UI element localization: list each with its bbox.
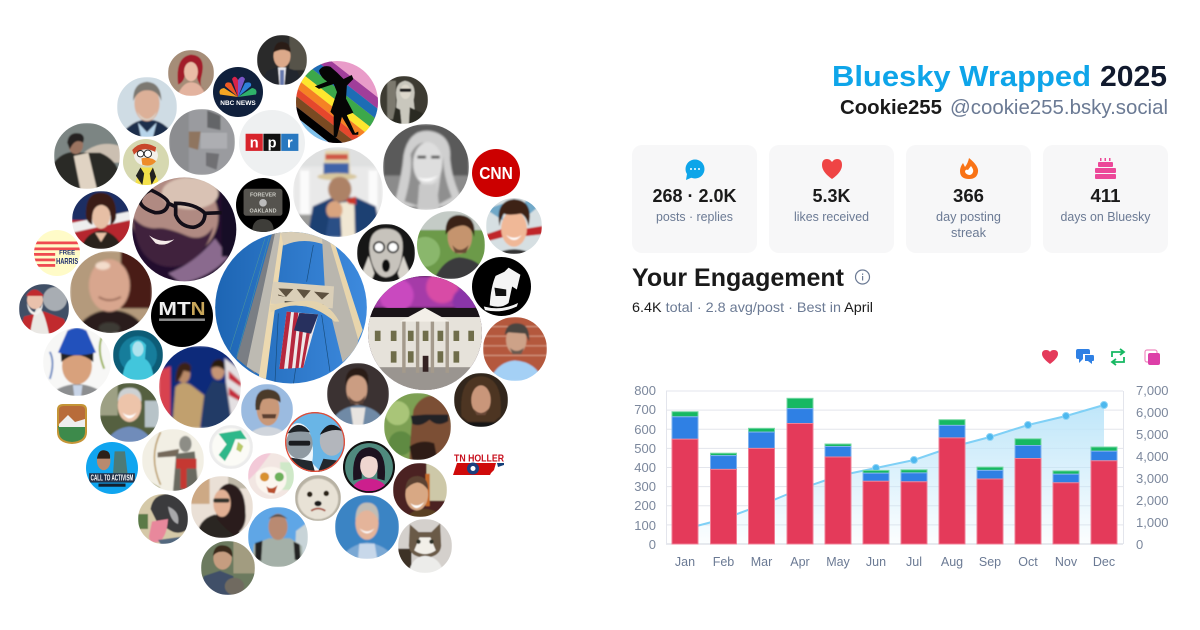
panel: day posting streak: streak (951, 226, 987, 240)
avatar: MTN logo: N (191, 298, 206, 319)
avatar: man dark jacket (327, 363, 389, 425)
chart legend (1042, 349, 1160, 365)
avatar: NPR logo: r (287, 136, 293, 152)
avatar: red-haired woman (168, 50, 214, 96)
left axis labels (634, 383, 656, 552)
avatar: man in suit (257, 35, 307, 85)
avatar: goth girl (343, 441, 395, 493)
avatar: ship logo (472, 257, 531, 316)
right axis labels: 4,000 (1136, 449, 1169, 464)
stacked bars (672, 398, 1117, 544)
avatar: bw blonde portrait (383, 124, 469, 210)
avatar: Mark Cuban (393, 463, 447, 517)
month labels: Oct (1018, 555, 1038, 569)
avatar: call to activism (86, 442, 138, 494)
month labels: Jan (675, 555, 695, 569)
right axis labels (1136, 383, 1169, 552)
avatar: uncle sam (293, 147, 383, 237)
right axis labels: 1,000 (1136, 515, 1169, 530)
user name and handle: Cookie255 (840, 97, 942, 119)
avatar: couple at flags (159, 346, 241, 428)
panel: likes received (769, 145, 894, 253)
panel: days on Bluesky (1043, 145, 1168, 253)
user name and handle: @cookie255.bsky.social (950, 97, 1168, 119)
avatar: alliance shield badge (57, 404, 87, 444)
cumulative area and line (685, 402, 1108, 544)
panel: avatar bubble cluster (19, 34, 547, 595)
month labels: Mar (751, 555, 772, 569)
month labels: Apr (790, 555, 810, 569)
left axis labels: 800 (634, 383, 656, 398)
right axis labels: 5,000 (1136, 427, 1169, 442)
avatar: NPR logo (239, 110, 305, 176)
panel: posts and replies (632, 145, 757, 253)
avatar: the scream (357, 224, 415, 282)
engagement summary: 6.4K total · 2.8 avg/post · Best in April (632, 299, 873, 315)
icon: legend quotes (1145, 350, 1160, 365)
avatar: free harris logo: FREE (59, 250, 75, 256)
avatar: dog tongue out (138, 494, 188, 544)
icon: legend reposts (1112, 349, 1124, 365)
icon: cake (1095, 158, 1116, 179)
avatar: twins with red ring (285, 412, 345, 472)
avatar: woman with flag (72, 191, 130, 249)
icon: legend replies (1076, 349, 1094, 364)
left axis labels: 700 (634, 402, 656, 417)
avatar: blonde in sunglasses (380, 76, 428, 124)
panel: days on Bluesky: days on Bluesky (1060, 210, 1151, 224)
left axis labels: 600 (634, 422, 656, 437)
month labels: Feb (713, 555, 734, 569)
avatar: white dog (295, 475, 341, 521)
avatar: glasses man main (132, 177, 236, 282)
avatar: bridge with flag (215, 232, 367, 384)
month labels: Jun (866, 555, 886, 569)
panel: posts and replies: posts · replies (656, 210, 733, 224)
avatar: woman with dark hair (191, 476, 253, 538)
avatar: man at brick wall (483, 317, 547, 381)
avatar: teal hoodie (113, 330, 163, 380)
avatar: forever oakland (236, 178, 290, 232)
panel: day posting streak (906, 145, 1031, 253)
avatar: man lying on couch (54, 123, 120, 189)
panel: days on Bluesky: 411 (1090, 185, 1120, 206)
right axis labels: 3,000 (1136, 471, 1169, 486)
month labels: May (826, 555, 851, 569)
avatar: anime cat girl (248, 453, 294, 499)
logo: TN Holler (453, 452, 504, 475)
right axis labels: 7,000 (1136, 383, 1169, 398)
avatar: long curly hair man (454, 373, 508, 427)
avatar: cartoon duck (123, 139, 169, 185)
title: 2025 (1100, 61, 1167, 93)
left axis labels: 300 (634, 479, 656, 494)
avatar: free harris logo (34, 230, 80, 276)
avatar: CNN logo: CNN (479, 163, 513, 183)
avatar: party hat man (44, 328, 110, 396)
avatar: man with dog (201, 541, 255, 595)
avatar: NBC News logo: NBC NEWS (220, 100, 256, 107)
avatar: CNN logo (472, 149, 520, 197)
icon: info (856, 270, 870, 284)
panel: likes received: 5.3K (812, 185, 851, 206)
panel: day posting streak: 366 (953, 185, 984, 206)
avatar: grey concrete (169, 109, 235, 175)
avatar: white house fireworks (368, 276, 482, 390)
heading: Your Engagement: Your Engagement (632, 264, 845, 292)
icon: legend heart (1042, 350, 1058, 364)
avatar: forever oakland: FOREVER (250, 192, 276, 198)
left axis labels: 0 (649, 537, 656, 552)
avatar: NPR logo: p (268, 136, 277, 152)
right axis labels: 2,000 (1136, 493, 1169, 508)
left axis labels: 400 (634, 460, 656, 475)
panel: likes received: likes received (794, 210, 869, 224)
avatar: bald man (70, 251, 152, 333)
avatar: MTN logo: MT (158, 298, 191, 319)
icon: speech bubble (686, 160, 704, 180)
month labels: Sep (979, 555, 1001, 569)
avatar: Maddow (486, 198, 542, 254)
left axis labels: 200 (634, 498, 656, 513)
user name and handle (840, 97, 1168, 119)
avatar: archer knight (142, 429, 204, 491)
left axis labels: 100 (634, 518, 656, 533)
avatar: rainbow silhouette (296, 61, 378, 143)
avatar: smiling man on blue (335, 495, 399, 559)
avatar: NBC News logo (213, 67, 263, 117)
left axis labels: 500 (634, 441, 656, 456)
avatar: man in forest (417, 211, 485, 279)
avatar: MTN logo (151, 285, 213, 347)
icon: heart (822, 159, 842, 179)
right axis labels: 6,000 (1136, 405, 1169, 420)
month labels: Aug (941, 555, 963, 569)
panel: day posting streak: day posting (936, 210, 1001, 224)
avatar: man in hoodie (248, 507, 308, 567)
avatar: cat (398, 519, 452, 573)
avatar: michigan map (209, 425, 253, 469)
logo: TN Holler: TN HOLLER (454, 452, 504, 464)
avatar: Buttigieg (241, 384, 293, 436)
panel: posts and replies: 268 · 2.0K (652, 185, 737, 206)
month labels (675, 555, 1115, 569)
avatar: NPR logo: n (250, 136, 259, 152)
avatar: sunglasses man (384, 393, 451, 460)
bar and line chart (634, 383, 1169, 569)
avatar: forever oakland: OAKLAND (250, 209, 277, 215)
avatar: older man with white hair (117, 77, 177, 137)
icon: flame (960, 158, 978, 179)
avatar: George Takei (100, 383, 159, 442)
month labels: Jul (906, 555, 922, 569)
avatar: santa (19, 284, 69, 334)
month labels: Nov (1055, 555, 1078, 569)
title: Bluesky Wrapped (832, 61, 1091, 93)
right axis labels: 0 (1136, 537, 1143, 552)
month labels: Dec (1093, 555, 1115, 569)
